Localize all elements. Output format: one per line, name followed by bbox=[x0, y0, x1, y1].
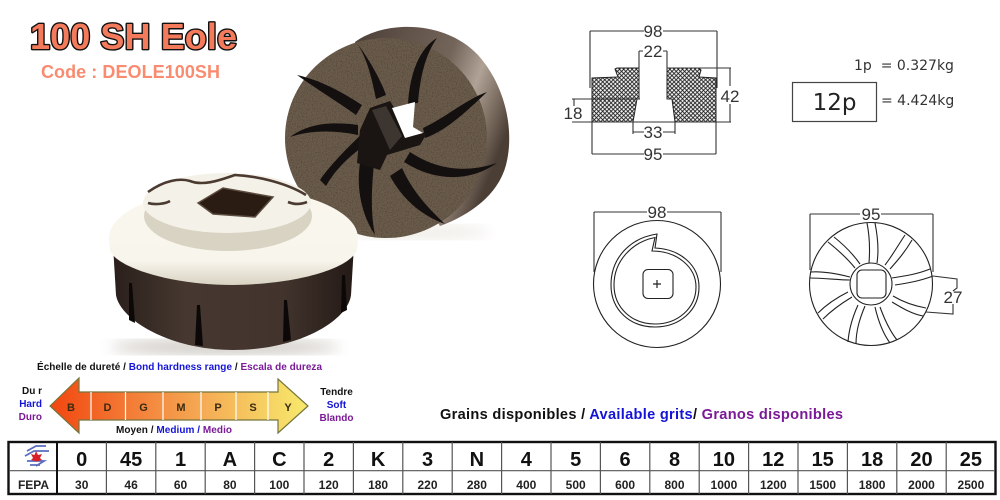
dimension labels: 95 bbox=[644, 145, 662, 164]
hardness letters: D bbox=[104, 402, 112, 414]
section body bbox=[592, 68, 716, 122]
weight info: 1p = 0.327kg bbox=[854, 58, 954, 74]
table row: FEPA values: 100 bbox=[269, 478, 290, 492]
photo: hub bbox=[143, 173, 312, 251]
table row: FEPA values: 1500 bbox=[809, 478, 836, 492]
hardness arrow bbox=[50, 378, 308, 433]
label: hard: Duro bbox=[19, 412, 42, 423]
table row: grit codes: K bbox=[371, 449, 386, 471]
product photo bbox=[109, 27, 509, 354]
table row: FEPA values: 80 bbox=[223, 478, 237, 492]
table row: FEPA values: 1200 bbox=[760, 478, 787, 492]
grit table bbox=[8, 442, 996, 494]
table row: grit codes bbox=[76, 449, 982, 471]
weight info: 12p bbox=[813, 90, 856, 116]
table row: grit codes: 12 bbox=[762, 449, 784, 471]
table row: FEPA values: 280 bbox=[467, 478, 487, 492]
table row: grit codes: 8 bbox=[669, 449, 680, 471]
table row: FEPA values: 600 bbox=[615, 478, 635, 492]
label: hard: Du r bbox=[22, 386, 42, 397]
top view drawing bbox=[594, 203, 721, 348]
bottom view drawing: 27 bbox=[944, 288, 962, 307]
table row: FEPA values: 800 bbox=[664, 478, 685, 492]
hardness letters: P bbox=[214, 402, 222, 414]
product code: Code : DEOLE100SH bbox=[41, 62, 220, 82]
available grits heading: Grains disponibles / Available grits/ Granos disponibles bbox=[440, 407, 843, 423]
label: hard bbox=[19, 386, 42, 423]
table row: FEPA values: 30 bbox=[75, 478, 89, 492]
label: medium: Moyen / Medium / Medio bbox=[116, 425, 232, 436]
hardness letters: G bbox=[139, 402, 148, 414]
table row: grit codes: 15 bbox=[812, 449, 834, 471]
photo: white ring bbox=[109, 188, 358, 285]
table row: FEPA values bbox=[18, 478, 985, 492]
hardness scale title: Échelle de dureté / Bond hardness range / Escala de dureza bbox=[37, 360, 322, 373]
hardness letters bbox=[67, 402, 292, 414]
weight info bbox=[792, 58, 954, 122]
hardness letters: B bbox=[67, 402, 75, 414]
dimension labels: 33 bbox=[644, 123, 662, 142]
top view drawing: 98 bbox=[648, 203, 666, 222]
table row: grit codes: A bbox=[223, 449, 237, 471]
table row: grit codes: N bbox=[470, 449, 484, 471]
table row: grit codes: 2 bbox=[323, 449, 334, 471]
table row: FEPA values: 120 bbox=[319, 478, 339, 492]
bottom view drawing: 95 bbox=[862, 205, 880, 224]
label: soft: Soft bbox=[327, 400, 347, 411]
dimension labels: 22 bbox=[644, 42, 662, 61]
table row: grit codes: 3 bbox=[422, 449, 433, 471]
table row: FEPA values: 2500 bbox=[958, 478, 985, 492]
hardness letters: Y bbox=[284, 402, 292, 414]
photo: front wheel body bbox=[113, 245, 354, 350]
table row: grit codes: 20 bbox=[910, 449, 933, 471]
label: soft: Tendre bbox=[320, 387, 353, 398]
table row: FEPA values: 220 bbox=[417, 478, 438, 492]
table row: grit codes: 4 bbox=[521, 449, 533, 471]
table row: FEPA values: 180 bbox=[368, 478, 388, 492]
hardness letters: M bbox=[176, 402, 186, 414]
table row: FEPA values: 1000 bbox=[711, 478, 738, 492]
rear wheel slots bbox=[290, 38, 497, 235]
title: 100 SH Eole bbox=[30, 16, 237, 57]
table row: FEPA values: 400 bbox=[516, 478, 537, 492]
photo: front wheel bbox=[109, 173, 358, 354]
table row: grit codes: 1 bbox=[175, 449, 186, 471]
cross-section drawing bbox=[564, 22, 739, 164]
table row: FEPA values: FEPA bbox=[18, 478, 49, 492]
table row: FEPA values: 2000 bbox=[908, 478, 935, 492]
table row: FEPA values: 500 bbox=[566, 478, 586, 492]
table row: FEPA values: 1800 bbox=[859, 478, 886, 492]
icon: company logo bbox=[25, 446, 49, 466]
photo: rear grinding wheel bbox=[285, 27, 509, 239]
dimension labels: 42 bbox=[721, 87, 739, 106]
bottom view drawing bbox=[810, 205, 962, 346]
table row: grit codes: 0 bbox=[76, 449, 87, 471]
table row: grit codes: 18 bbox=[861, 449, 883, 471]
table row: grit codes: 6 bbox=[620, 449, 631, 471]
table row: grit codes: 45 bbox=[120, 449, 142, 471]
label: soft: Blando bbox=[320, 413, 353, 424]
hardness letters: S bbox=[249, 402, 257, 414]
label: hard: Hard bbox=[19, 399, 42, 410]
weight info: = 4.424kg bbox=[881, 93, 954, 109]
dimension labels bbox=[564, 22, 739, 164]
label: soft bbox=[320, 387, 353, 424]
dimension labels: 98 bbox=[644, 22, 662, 41]
table row: FEPA values: 46 bbox=[124, 478, 138, 492]
table row: FEPA values: 60 bbox=[174, 478, 187, 492]
table row: grit codes: 10 bbox=[713, 449, 735, 471]
dimension labels: 18 bbox=[564, 104, 582, 123]
table row: grit codes: C bbox=[272, 449, 287, 471]
table row: grit codes: 5 bbox=[570, 449, 581, 471]
table row: grit codes: 25 bbox=[960, 449, 982, 471]
